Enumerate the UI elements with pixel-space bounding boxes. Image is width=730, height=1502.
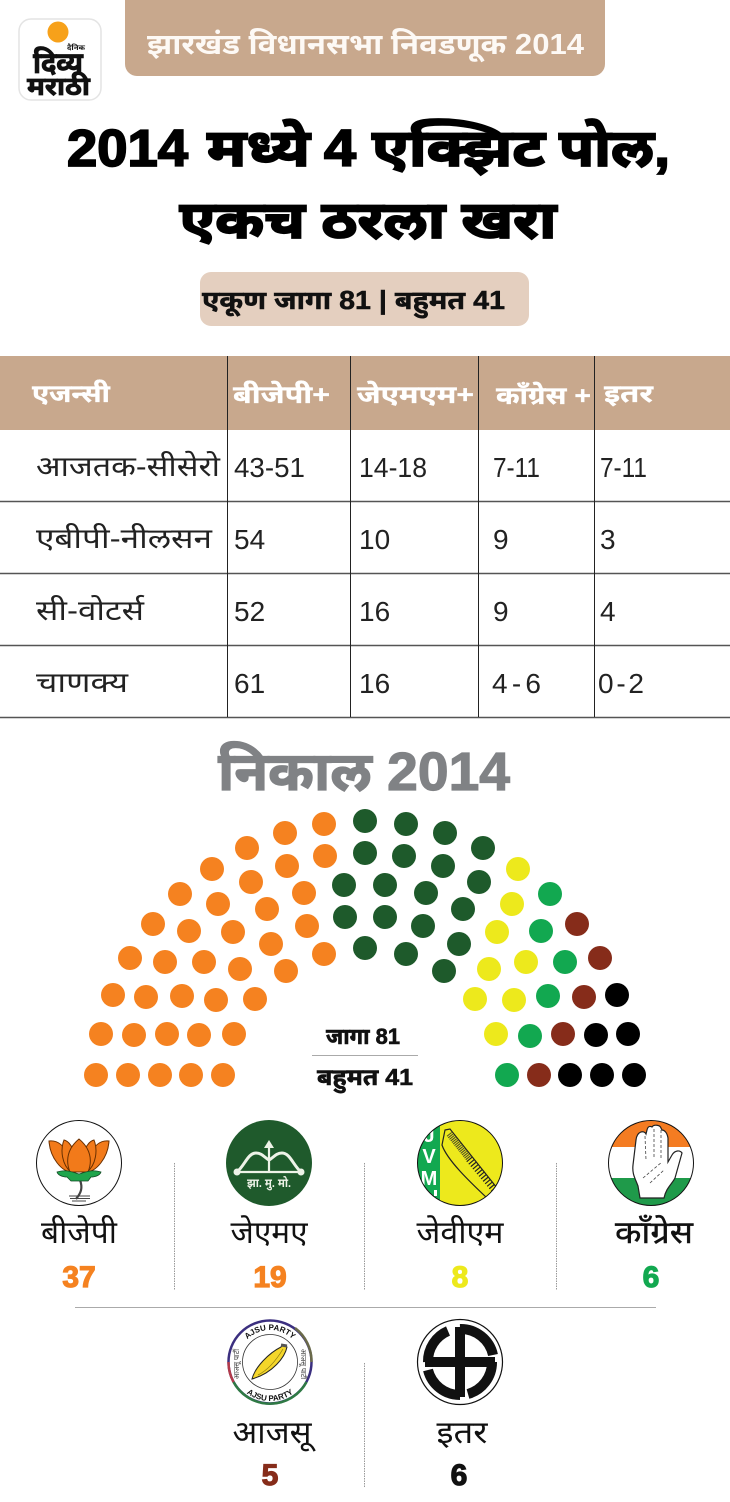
icon: bow and arrow [226, 1120, 312, 1206]
icon: banana: AJSU PARTY [246, 1388, 292, 1401]
party: AJSU [227, 1319, 317, 1492]
row: C-Voter: 9 [493, 596, 509, 627]
logo: Divya Marathi: मराठी [27, 71, 91, 101]
row: Aajtak-Cicero [36, 450, 647, 483]
icon: comb [417, 1120, 503, 1206]
row: C-Voter: 52 [234, 596, 265, 627]
table header: जेएमएम+ [357, 380, 474, 409]
title: पोल, [559, 120, 670, 178]
table: exit polls [0, 356, 730, 718]
header banner: झारखंड विधानसभा निवडणूक 2014 [147, 28, 584, 62]
seats: Congress 6 [495, 882, 577, 1087]
table header: एजन्सी [32, 379, 111, 408]
subtitle pill: total seats and majority [200, 272, 529, 326]
icon: swastika symbol [418, 1320, 502, 1404]
logo: Divya Marathi [19, 19, 101, 101]
icon: hand [608, 1120, 694, 1206]
title [67, 119, 670, 250]
party: Congress [608, 1120, 694, 1294]
row: Chanakya: 4-6 [492, 668, 541, 699]
header banner [125, 0, 605, 76]
party: Congress: 6 [643, 1261, 659, 1294]
table header [0, 356, 730, 430]
title: 4 [324, 120, 356, 178]
row: ABP-Nielsen [36, 522, 616, 555]
table header: इतर [604, 380, 654, 408]
row: ABP-Nielsen: एबीपी-नीलसन [36, 522, 213, 554]
party: BJP: बीजेपी [41, 1215, 118, 1250]
row: Chanakya: 61 [234, 668, 265, 699]
title: एक्झिट [372, 120, 546, 178]
chart centre label: जागा 81 [326, 1024, 400, 1049]
party: AJSU: आजसू [232, 1415, 317, 1452]
row: C-Voter: 16 [359, 596, 390, 627]
party: Congress: काँग्रेस [615, 1215, 694, 1250]
party: BJP [36, 1120, 122, 1294]
icon: comb: V [422, 1146, 436, 1168]
title: 2014 [67, 120, 188, 178]
party: BJP: 37 [62, 1261, 96, 1294]
row: Aajtak-Cicero: 7-11 [600, 452, 647, 483]
icon: bow and arrow: झा. मु. मो. [247, 1175, 291, 1192]
row: C-Voter [36, 594, 616, 627]
title: एकच ठरला खरा [180, 192, 558, 250]
seats: others 6 [558, 983, 646, 1087]
icon: comb: M [421, 1168, 437, 1190]
icon: banana: आजसू पार्टी [232, 1348, 242, 1379]
row: ABP-Nielsen: 54 [234, 524, 265, 555]
row: Chanakya: 0-2 [598, 668, 644, 699]
party: AJSU: 5 [262, 1459, 278, 1492]
table header: बीजेपी+ [233, 380, 330, 409]
party: JVM [416, 1120, 504, 1294]
seats: JMM 19 [332, 809, 495, 983]
seats: JVM 8 [463, 857, 538, 1046]
logo: Divya Marathi: दैनिक [67, 44, 85, 52]
row: C-Voter: 4 [600, 596, 616, 627]
row: Chanakya: 16 [359, 668, 390, 699]
party: JVM: 8 [452, 1261, 468, 1294]
party: others: इतर [436, 1415, 489, 1450]
seat chart [84, 809, 646, 1094]
party: JMM [226, 1120, 312, 1294]
heading: results 2014: निकाल 2014 [218, 741, 510, 802]
party: JVM: जेवीएम [416, 1215, 504, 1250]
chart centre label [312, 1024, 418, 1094]
row: Aajtak-Cicero: 43-51 [234, 452, 305, 483]
party: others [418, 1320, 502, 1492]
row: ABP-Nielsen: 3 [600, 524, 616, 555]
row: ABP-Nielsen: 9 [493, 524, 509, 555]
title: मध्ये [207, 119, 311, 178]
party: others: 6 [451, 1459, 467, 1492]
icon: lotus [36, 1120, 122, 1206]
row: Aajtak-Cicero: 14-18 [359, 452, 427, 483]
row: Chanakya [36, 667, 644, 699]
chart centre label: बहुमत 41 [317, 1064, 413, 1094]
subtitle pill: total seats and majority: एकूण जागा 81 | बहुमत 41 [202, 285, 505, 319]
table header: काँग्रेस + [496, 381, 591, 410]
logo: Divya Marathi: दिव्य [33, 46, 84, 80]
party: JMM: 19 [253, 1261, 287, 1294]
row: Aajtak-Cicero: 7-11 [493, 452, 540, 483]
row: Aajtak-Cicero: आजतक-सीसेरो [36, 450, 221, 482]
seats: BJP 37 [84, 812, 337, 1087]
icon: banana: AJSU PARTY [246, 1324, 296, 1340]
icon: banana [227, 1319, 313, 1405]
row: C-Voter: सी-वोटर्स [36, 594, 145, 626]
seats: AJSU 5 [527, 912, 612, 1087]
row: ABP-Nielsen: 10 [359, 524, 390, 555]
icon: banana: आजसू पार्टी [298, 1349, 308, 1380]
row: Chanakya: चाणक्य [36, 667, 129, 698]
party: JMM: जेएमए [230, 1215, 308, 1250]
icon: comb: J [423, 1125, 435, 1147]
